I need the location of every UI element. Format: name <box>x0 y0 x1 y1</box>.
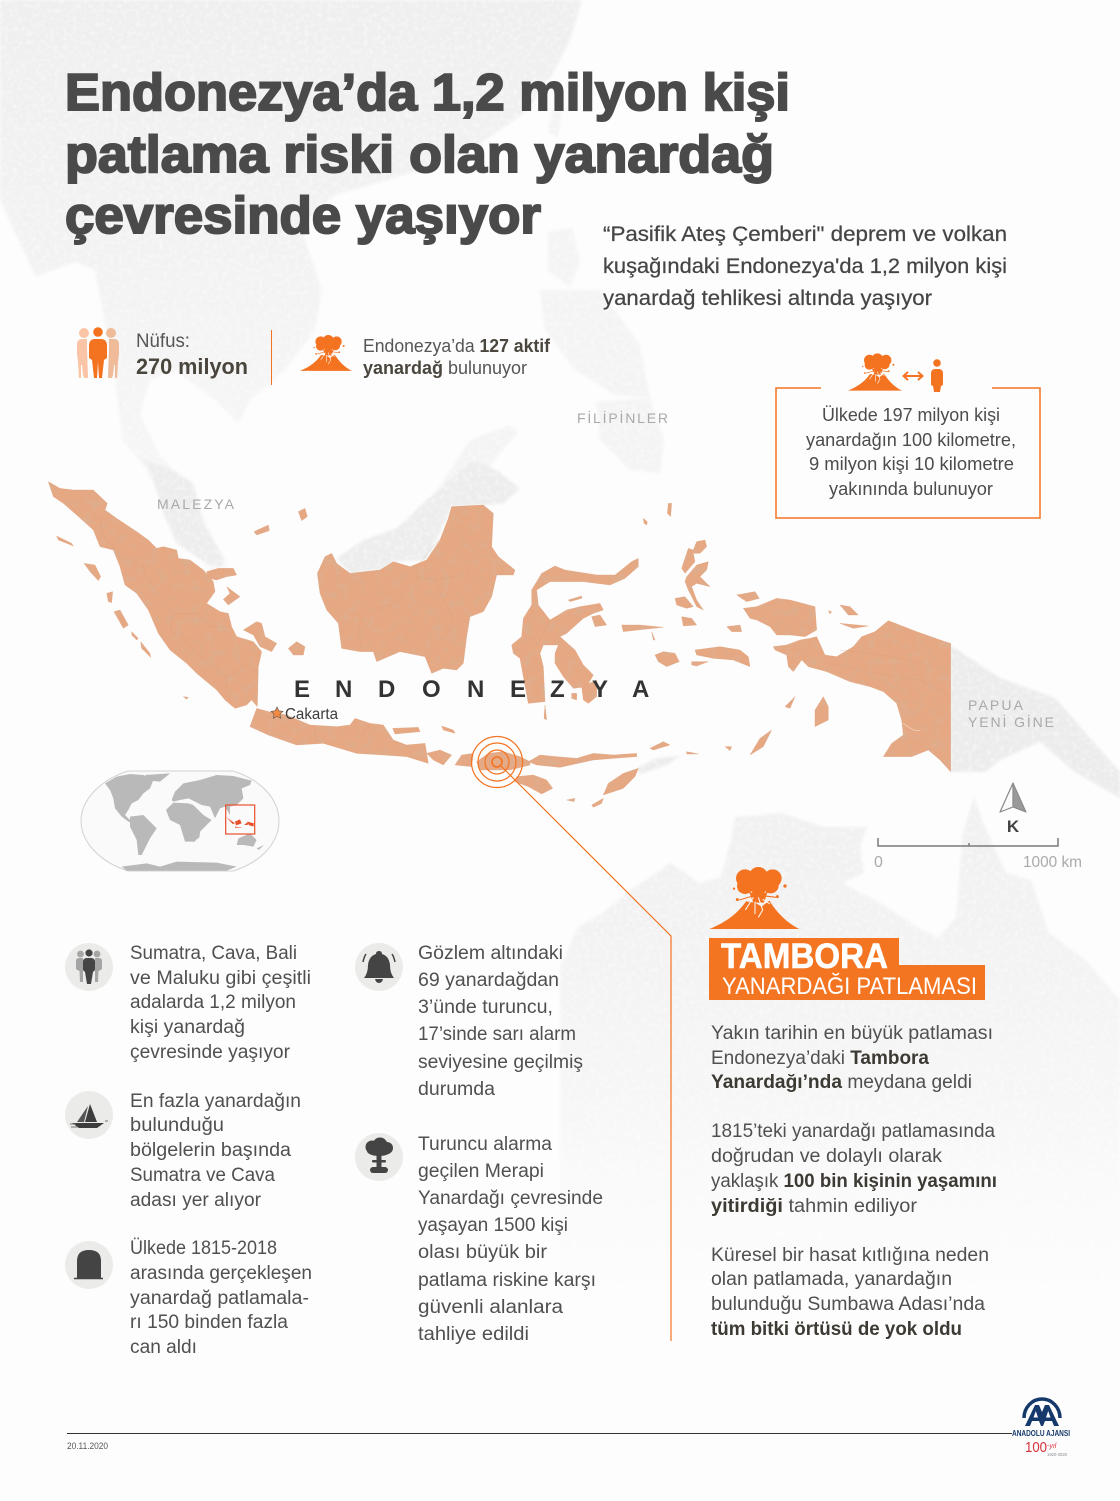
locator: world map <box>81 771 279 871</box>
logo: Anadolu Ajansi: ANADOLU AJANSI <box>1012 1429 1070 1438</box>
icon: three people <box>77 327 119 378</box>
intro text: yanardağ tehlikesi altında yaşıyor <box>603 287 932 310</box>
title: çevresinde yaşıyor <box>65 187 541 245</box>
tambora description text: Yakın tarihin en büyük patlaması <box>711 1023 993 1044</box>
item text <box>418 1134 603 1345</box>
item text: geçilen Merapi <box>418 1161 544 1182</box>
intro text: kuşağındaki Endonezya'da 1,2 milyon kişi <box>603 255 1007 278</box>
item: alert levels <box>355 943 583 1100</box>
logo: Anadolu Ajansi: 1920-2020 <box>1047 1452 1067 1457</box>
volcano count text: Endonezya’da 127 aktif <box>363 336 551 356</box>
tambora heading <box>709 867 985 1000</box>
tambora description text: bulunduğu Sumbawa Adası’nda <box>711 1294 985 1315</box>
icon: volcano <box>848 353 902 391</box>
tambora description text: Küresel bir hasat kıtlığına neden <box>711 1245 989 1266</box>
map label: Endonezya: ENDONEZYA <box>294 676 649 703</box>
item text: yanardağ patlamala- <box>130 1288 309 1309</box>
icon: person <box>931 359 943 392</box>
item text: Sumatra ve Cava <box>130 1165 275 1186</box>
callout text: Ülkede 197 milyon kişi <box>822 405 1000 425</box>
item: islands population <box>65 943 311 1063</box>
logo: Anadolu Ajansi <box>1012 1399 1070 1457</box>
icon: large volcano <box>709 867 799 929</box>
item text: kişi yanardağ <box>130 1017 245 1038</box>
stat: population <box>77 327 248 379</box>
callout: distance box <box>776 353 1040 518</box>
item text: patlama riskine karşı <box>418 1270 596 1291</box>
item text: Yanardağı çevresinde <box>418 1188 603 1209</box>
item text: arasında gerçekleşen <box>130 1263 312 1284</box>
item text <box>130 1238 312 1358</box>
logo: Anadolu Ajansi: 100 <box>1025 1439 1047 1456</box>
item text <box>418 943 583 1100</box>
tambora description text: Yanardağı’nda meydana geldi <box>711 1072 972 1093</box>
item text: can aldı <box>130 1337 197 1358</box>
tambora description text: yitirdiği tahmin ediliyor <box>711 1196 918 1217</box>
western Indonesia: Sumatra, Kalimantan, Java <box>48 482 530 770</box>
locator box <box>226 805 255 834</box>
item text: Ülkede 1815-2018 <box>130 1238 277 1259</box>
icon: mushroom cloud <box>355 1133 403 1181</box>
title <box>65 64 790 245</box>
item text: adalarda 1,2 milyon <box>130 992 296 1013</box>
intro text <box>603 223 1007 310</box>
intro text: “Pasifik Ateş Çemberi" deprem ve volkan <box>603 223 1007 246</box>
item: Merapi evacuation <box>355 1133 603 1345</box>
item text: 17’sinde sarı alarm <box>418 1024 576 1045</box>
capital: Cakarta: Cakarta <box>285 706 338 723</box>
item text: adası yer alıyor <box>130 1190 262 1211</box>
icon: arrow between volcano and person <box>904 372 922 380</box>
item: eruption deaths <box>65 1238 312 1358</box>
icon: people <box>65 943 113 991</box>
icon: tombstone <box>65 1241 113 1289</box>
logo: Anadolu Ajansi: -yıl <box>1047 1443 1057 1450</box>
callout text: yakınında bulunuyor <box>829 479 993 499</box>
tambora heading: YANARDAĞI PATLAMASI <box>722 973 977 1000</box>
tambora description text: olan patlamada, yanardağın <box>711 1269 952 1290</box>
tambora description text: doğrudan ve dolaylı olarak <box>711 1146 943 1167</box>
scale bar <box>874 838 1082 871</box>
map label: Papua Yeni Gine <box>968 697 1054 730</box>
scale bar: 0 <box>874 854 883 871</box>
callout text <box>806 405 1016 499</box>
icon: volcano <box>300 335 352 371</box>
item text: tahliye edildi <box>418 1324 529 1345</box>
stat: active volcanoes <box>300 335 551 378</box>
tambora heading: TAMBORA <box>721 937 888 976</box>
item text: Sumatra, Cava, Bali <box>130 943 297 964</box>
item text: rı 150 binden fazla <box>130 1312 288 1333</box>
item text: olası büyük bir <box>418 1242 548 1263</box>
map: Indonesia islands <box>48 482 951 807</box>
title: patlama riski olan yanardağ <box>65 126 774 184</box>
item text: durumda <box>418 1079 495 1100</box>
icon: bell <box>355 943 403 991</box>
volcano count text: yanardağ bulunuyor <box>363 358 527 378</box>
item text: güvenli alanlara <box>418 1297 563 1318</box>
tambora description text: 1815’teki yanardağı patlamasında <box>711 1121 995 1142</box>
item: regions with most volcanoes <box>65 1091 301 1211</box>
callout text: yanardağın 100 kilometre, <box>806 430 1016 450</box>
item text: ve Maluku gibi çeşitli <box>130 968 311 989</box>
epicentre marker with leader line <box>472 736 671 1341</box>
map label: Malezya: MALEZYA <box>157 496 235 512</box>
scale bar: 1000 km <box>1023 854 1082 871</box>
tambora description text <box>711 1023 997 1340</box>
tambora description text: yaklaşık 100 bin kişinin yaşamını <box>711 1171 997 1192</box>
map label: Filipinler: FİLİPİNLER <box>577 409 668 426</box>
item text: yaşayan 1500 kişi <box>418 1215 568 1236</box>
item text: Gözlem altındaki <box>418 943 563 964</box>
heading banner <box>709 938 985 1000</box>
icon: boat <box>65 1091 113 1139</box>
volcano count text <box>363 336 551 378</box>
item text: çevresinde yaşıyor <box>130 1042 291 1063</box>
map label: Papua Yeni Gine: PAPUA <box>968 697 1024 713</box>
item text: bölgelerin başında <box>130 1140 291 1161</box>
item text: En fazla yanardağın <box>130 1091 301 1112</box>
tambora description text: Endonezya’daki Tambora <box>711 1048 929 1069</box>
map label: Papua Yeni Gine: YENİ GİNE <box>968 713 1054 730</box>
item text <box>130 943 311 1063</box>
title: Endonezya’da 1,2 milyon kişi <box>65 64 790 122</box>
date: 20.11.2020 <box>67 1441 108 1452</box>
eastern Indonesia: Sulawesi, Maluku, Papua, Nusa Tenggara <box>512 503 951 807</box>
callout text: 9 milyon kişi 10 kilometre <box>809 454 1014 474</box>
item text: Turuncu alarma <box>418 1134 552 1155</box>
item text <box>130 1091 301 1211</box>
item text: 3’ünde turuncu, <box>418 997 553 1018</box>
footer rule <box>67 1432 1012 1434</box>
item text: seviyesine geçilmiş <box>418 1052 583 1073</box>
compass <box>1000 783 1026 836</box>
item text: 69 yanardağdan <box>418 970 559 991</box>
compass: K <box>1007 817 1020 836</box>
tambora description text: tüm bitki örtüsü de yok oldu <box>711 1319 962 1340</box>
item text: bulunduğu <box>130 1115 224 1136</box>
population value: 270 milyon <box>136 354 248 379</box>
population label: Nüfus: <box>136 331 190 352</box>
